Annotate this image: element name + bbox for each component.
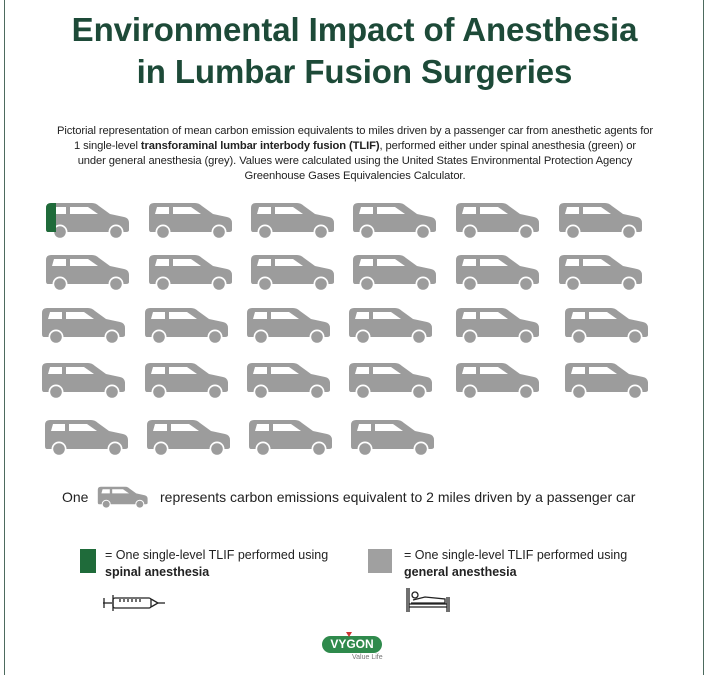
key statement: represents carbon emissions equivalent to 2 miles driven by a passenger car <box>160 489 635 505</box>
key statement <box>62 486 636 508</box>
green car (spinal) <box>46 203 129 240</box>
legend: spinal anesthesia: = One single-level TLIF performed using <box>105 548 328 562</box>
description text: under general anesthesia (grey). Values were calculated using the United States Environmental Protection Agency <box>78 155 632 167</box>
legend: spinal anesthesia: spinal anesthesia <box>105 565 209 579</box>
title: Environmental Impact of Anesthesia <box>72 11 637 48</box>
description text <box>57 125 653 182</box>
logo: Vygon <box>322 632 383 661</box>
icon: syringe <box>103 595 165 611</box>
legend: general anesthesia <box>368 548 627 612</box>
icon: car unit <box>98 486 148 508</box>
description text: 1 single-level transforaminal lumbar interbody fusion (TLIF), performed either under spinal anesthesia (green) or <box>74 140 636 152</box>
logo: Vygon: VYGON <box>330 637 374 651</box>
icon: bed <box>406 588 450 612</box>
legend: general anesthesia: general anesthesia <box>404 565 517 579</box>
description text: Greenhouse Gases Equivalencies Calculator. <box>245 170 465 182</box>
logo: Vygon: Value Life <box>352 654 383 661</box>
car pictogram grid <box>42 203 648 455</box>
title: in Lumbar Fusion Surgeries <box>137 53 572 90</box>
description text: Pictorial representation of mean carbon emission equivalents to miles driven by a passenger car from anesthetic agents for <box>57 125 653 137</box>
legend: general anesthesia: = One single-level TLIF performed using <box>404 548 627 562</box>
legend: spinal anesthesia <box>80 548 328 611</box>
key statement: One <box>62 489 88 505</box>
title <box>72 11 638 90</box>
